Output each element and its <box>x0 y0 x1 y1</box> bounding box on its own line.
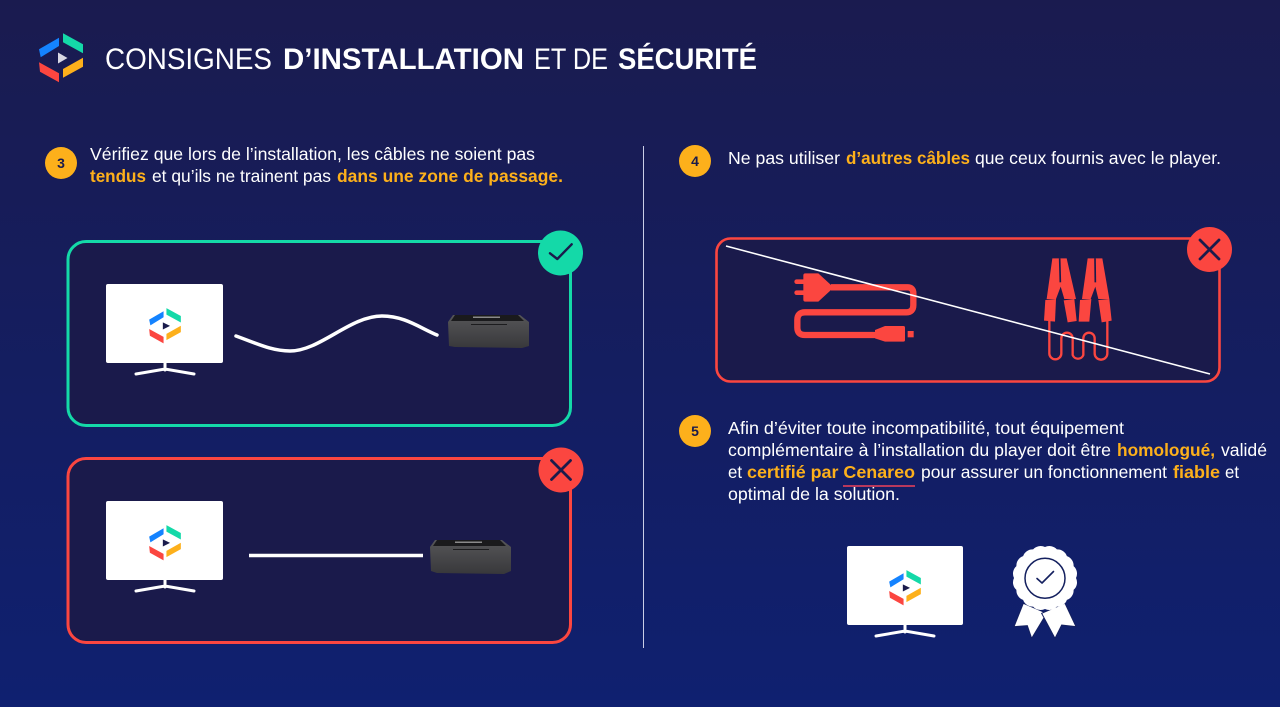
step 4 text: d’autres câbles <box>846 148 970 168</box>
step 5 number badge: 5 <box>691 423 699 439</box>
step 5 number badge <box>679 415 711 447</box>
icon: screen with logo <box>106 284 223 374</box>
icon: certification rosette <box>1013 546 1077 638</box>
step 3 text: tendus <box>90 166 146 186</box>
step 5 text: certifié par Cenareo <box>747 462 915 482</box>
icon: player box <box>448 315 529 348</box>
title: D’INSTALLATION <box>283 43 524 76</box>
step 3 number badge: 3 <box>57 155 65 171</box>
icon: power cable <box>794 273 914 342</box>
step 3 text: et qu’ils ne trainent pas <box>152 166 331 186</box>
step 4 text: Ne pas utiliser <box>728 148 840 168</box>
icon: red cross badge <box>538 448 584 492</box>
step 5 text: complémentaire à l’installation du player doit être <box>728 440 1111 460</box>
step 4 text: que ceux fournis avec le player. <box>975 148 1221 168</box>
step 5 text: et <box>1225 462 1239 482</box>
title: SÉCURITÉ <box>618 42 757 76</box>
logo <box>39 33 83 82</box>
step 5 text: pour assurer un fonctionnement <box>921 462 1167 482</box>
step 5 text: homologué, <box>1117 440 1215 460</box>
icon: red cross badge <box>1187 227 1232 272</box>
step 5 text: fiable <box>1173 462 1220 482</box>
slack cable <box>236 316 437 351</box>
step 5 text: Afin d’éviter toute incompatibilité, tout équipement <box>728 418 1124 438</box>
icon: player box <box>430 540 511 574</box>
panel: forbidden cables <box>716 227 1232 382</box>
step 4 number badge <box>679 145 711 177</box>
step 3 number badge <box>45 147 77 179</box>
taut cable <box>249 554 423 557</box>
step 4 text <box>728 148 1221 168</box>
step 3 text: dans une zone de passage. <box>337 166 563 186</box>
strike-through line <box>726 246 1210 374</box>
step 3 text <box>90 144 563 186</box>
icon: green check badge <box>538 230 583 276</box>
icon: screen with logo <box>847 546 963 636</box>
step 5 text <box>728 418 1267 504</box>
icon: screen with logo <box>106 501 223 591</box>
title: CONSIGNES <box>105 43 272 76</box>
step 5 text: validé <box>1221 440 1267 460</box>
title <box>105 42 757 76</box>
icon: jumper clamps <box>1044 258 1112 360</box>
panel: incorrect taut cable installation <box>68 448 584 642</box>
step 4 number badge: 4 <box>691 153 699 169</box>
panel: correct cable installation <box>68 230 583 426</box>
step 5 text: et <box>728 462 742 482</box>
step 3 text: Vérifiez que lors de l’installation, les câbles ne soient pas <box>90 144 535 164</box>
title: ET DE <box>534 43 608 76</box>
step 5 text: optimal de la solution. <box>728 484 900 504</box>
